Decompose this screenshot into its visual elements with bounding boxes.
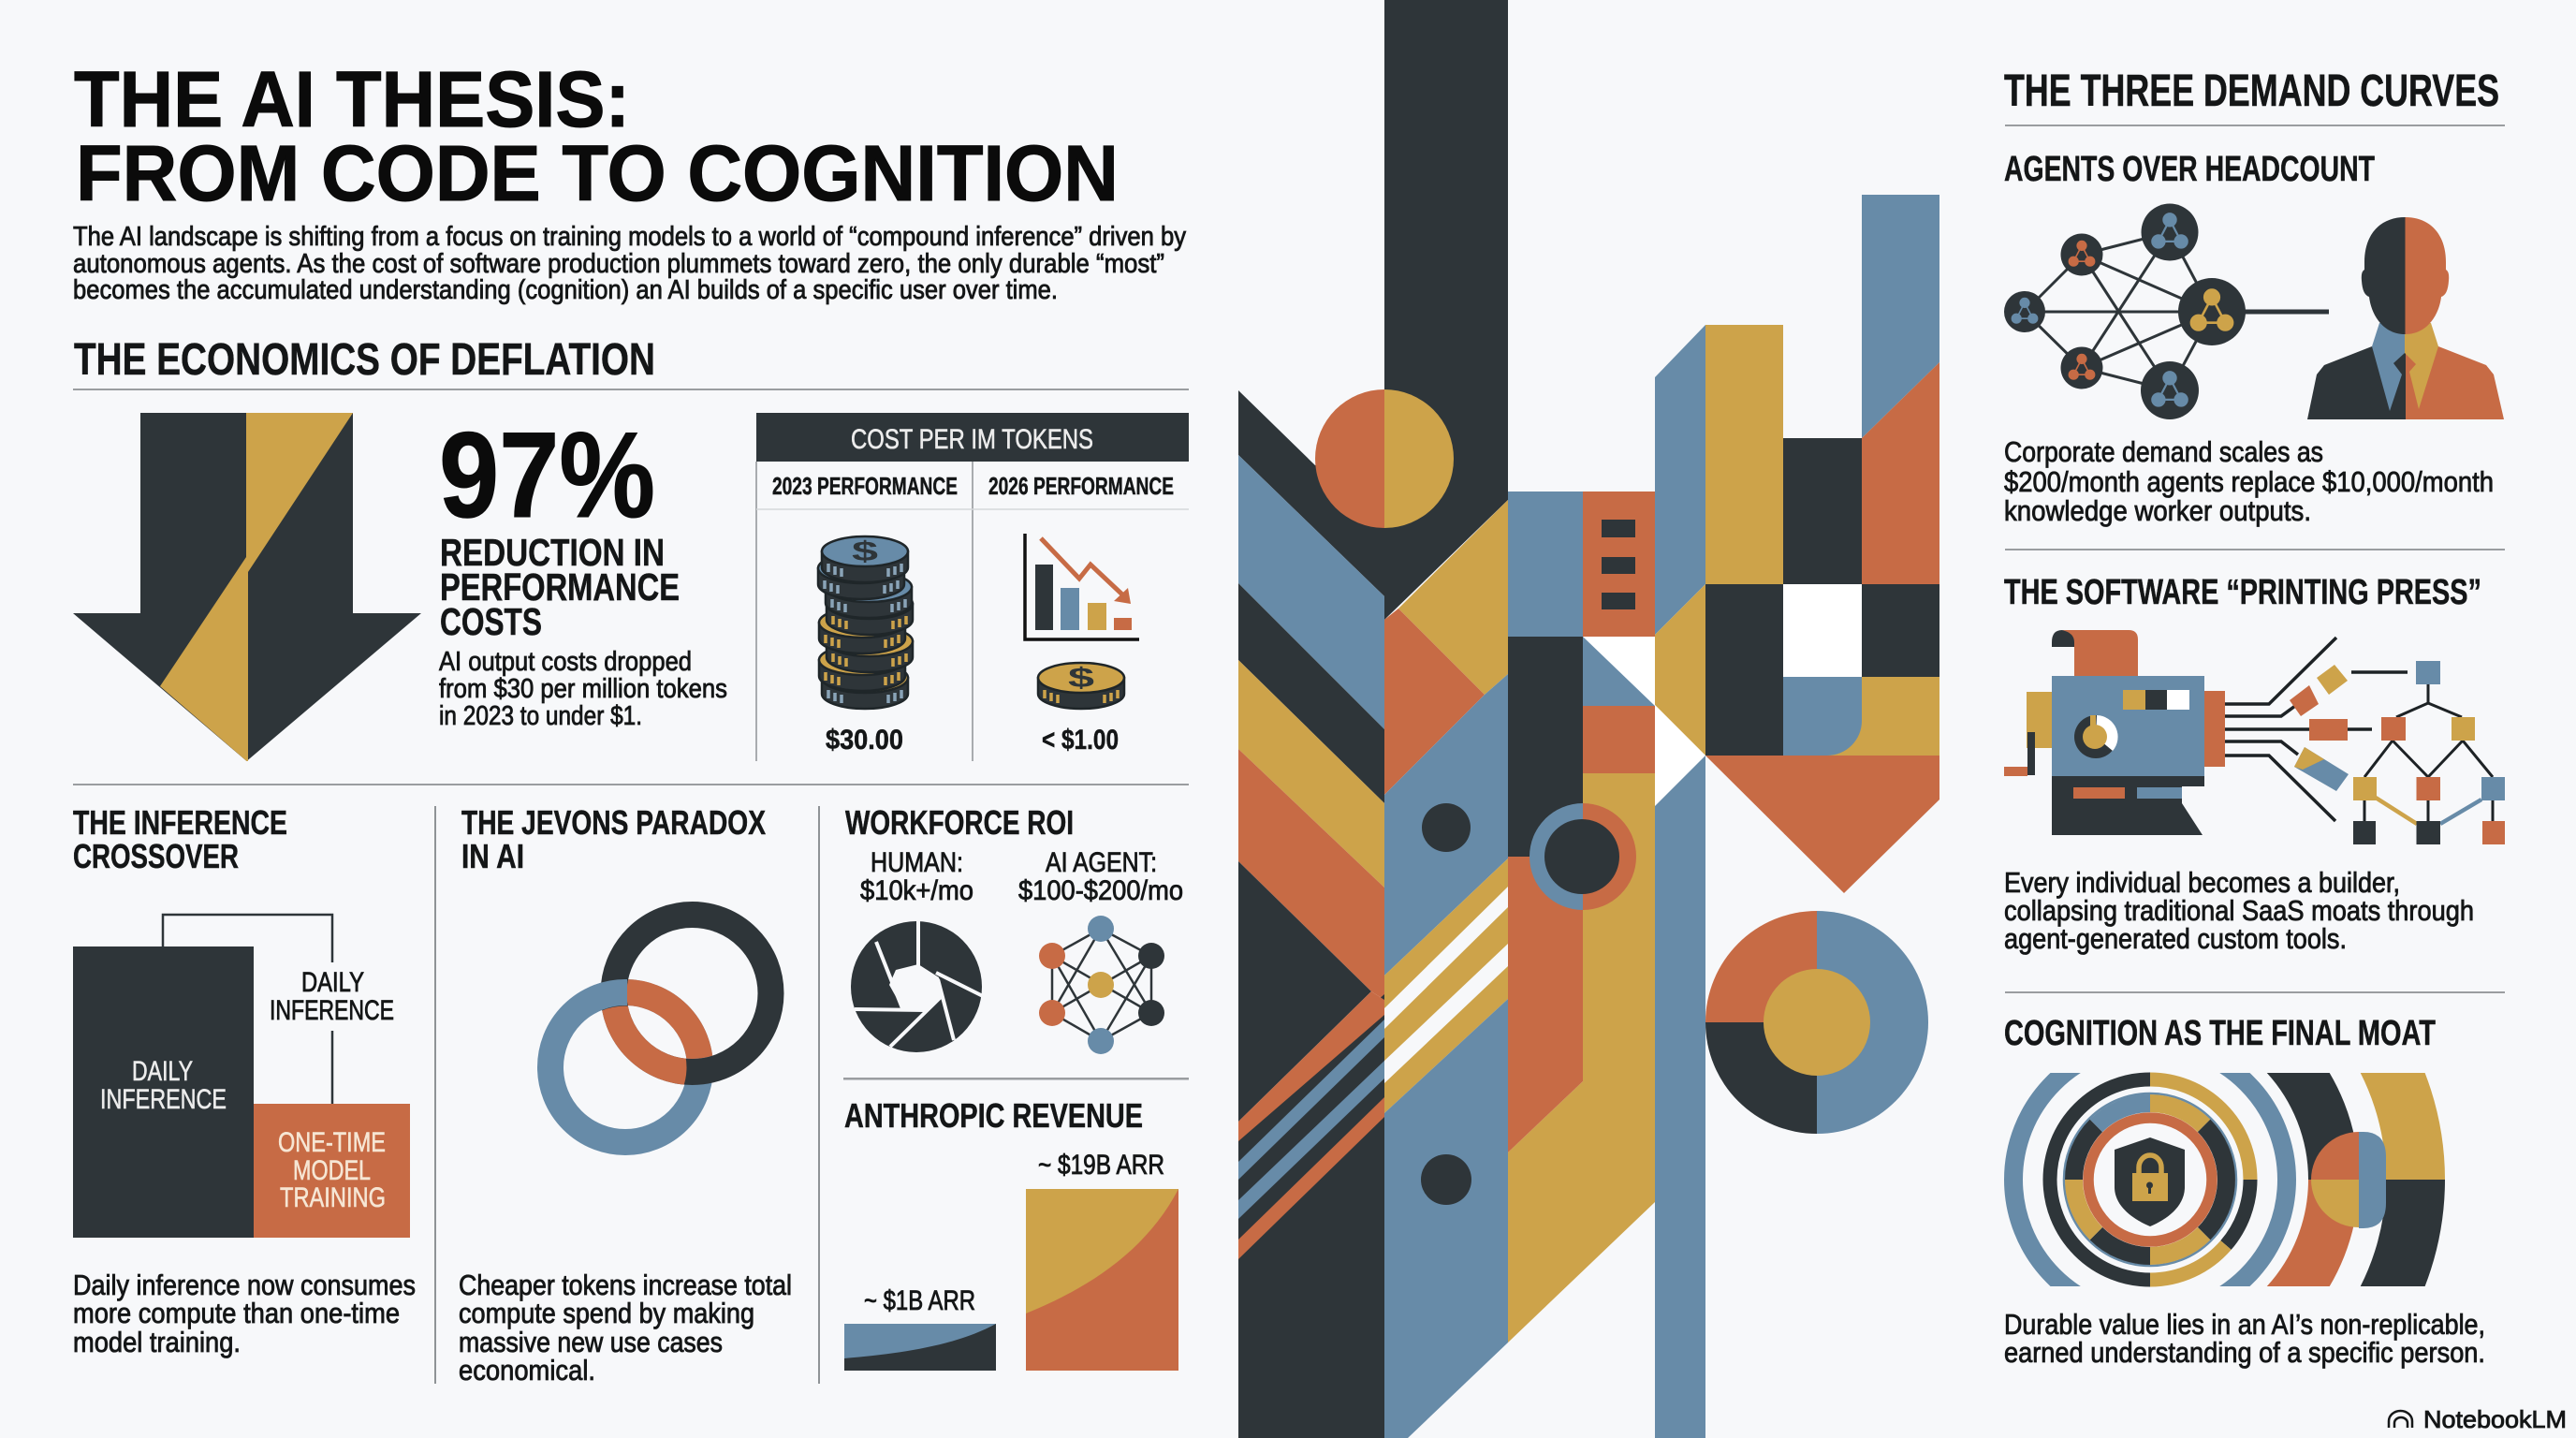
stat: 97 percent reduction: COSTS <box>440 600 542 643</box>
panel: cognition as the final moat <box>2004 1020 2483 1369</box>
stat: 97 percent reduction: AI output costs dropped <box>439 647 692 677</box>
panel: anthropic revenue: ANTHROPIC REVENUE <box>844 1096 1143 1135</box>
bar: daily inference <box>73 946 254 1238</box>
panel: the software printing press <box>2004 573 2505 955</box>
panel: cost per 1M tokens table: COST PER IM TOKENS <box>851 424 1093 455</box>
panel: cost per 1M tokens table <box>756 413 1189 761</box>
bar: daily inference: INFERENCE <box>100 1084 227 1115</box>
panel: the software printing press: agent-generated custom tools. <box>2004 922 2347 955</box>
icon: concentric moat with shield <box>2004 1073 2445 1286</box>
icon: split person silhouette <box>2307 217 2504 419</box>
panel: workforce ROI: $10k+/mo <box>860 875 973 906</box>
panel: the inference crossover: more compute than one-time <box>73 1297 400 1329</box>
icon: printing press machine <box>2004 630 2225 835</box>
icon: output lines and tiles <box>2225 638 2408 821</box>
bracket with daily inference label <box>163 915 394 1104</box>
panel: cost per 1M tokens table: $30.00 <box>826 725 903 756</box>
icon: coin stack <box>818 536 913 709</box>
panel: cognition as the final moat: earned understanding of a specific person. <box>2004 1336 2485 1369</box>
intro paragraph: autonomous agents. As the cost of software production plummets toward zero, the only durable “most” <box>73 249 1164 279</box>
central geometric artwork <box>1238 0 1939 1438</box>
panel: cost per 1M tokens table: 2026 PERFORMANCE <box>988 472 1174 500</box>
stat: 97 percent reduction: in 2023 to under $1. <box>439 701 642 731</box>
panel: anthropic revenue <box>844 1096 1178 1371</box>
panel: agents over headcount: $200/month agents replace $10,000/month <box>2004 465 2494 498</box>
logo: NotebookLM: NotebookLM <box>2423 1405 2567 1433</box>
intro paragraph: becomes the accumulated understanding (cognition) an AI builds of a specific user over time. <box>73 275 1058 305</box>
icon: single coin <box>1038 663 1124 709</box>
panel: the software printing press: collapsing traditional SaaS moats through <box>2004 894 2474 927</box>
icon: split circle <box>1315 389 1454 528</box>
title: FROM CODE TO COGNITION <box>76 129 1119 217</box>
panel: workforce ROI <box>845 803 1183 1054</box>
panel: the jevons paradox <box>459 803 792 1387</box>
icon: aperture <box>851 921 983 1052</box>
icon: quartered donut <box>1705 911 1928 1134</box>
stat: 97 percent reduction: from $30 per million tokens <box>439 674 727 704</box>
bar: one-time model training: MODEL <box>293 1155 371 1186</box>
icon: big down arrow <box>73 413 421 761</box>
panel: the jevons paradox: IN AI <box>461 837 524 875</box>
stat: 97 percent reduction <box>439 406 727 731</box>
icon: falling cost chart <box>1025 534 1139 639</box>
panel: the jevons paradox: Cheaper tokens increase total <box>459 1269 792 1301</box>
panel: the jevons paradox: economical. <box>459 1354 595 1387</box>
bar: one-time model training: ONE-TIME <box>278 1127 386 1158</box>
bar: 1B <box>844 1324 996 1371</box>
panel: agents over headcount <box>2004 150 2504 527</box>
bracket with daily inference label: INFERENCE <box>270 995 394 1026</box>
panel: agents over headcount: AGENTS OVER HEADCOUNT <box>2004 150 2375 189</box>
intro paragraph: The AI landscape is shifting from a focus on training models to a world of “compound inference” driven by <box>73 222 1186 252</box>
icon: agent mesh network <box>2004 204 2329 419</box>
panel: workforce ROI: AI AGENT: <box>1046 847 1157 878</box>
panel: the jevons paradox: compute spend by making <box>459 1297 754 1329</box>
panel: the jevons paradox: massive new use cases <box>459 1326 723 1358</box>
icon: interlocking rings <box>550 915 771 1142</box>
panel: workforce ROI: WORKFORCE ROI <box>845 803 1074 842</box>
panel: the inference crossover <box>73 803 416 1358</box>
panel: agents over headcount: Corporate demand scales as <box>2004 435 2323 468</box>
stat: 97 percent reduction: REDUCTION IN <box>440 531 665 574</box>
bracket with daily inference label: DAILY <box>301 967 364 998</box>
panel: cognition as the final moat: COGNITION AS THE FINAL MOAT <box>2004 1014 2436 1053</box>
title: THE AI THESIS: <box>74 55 630 143</box>
panel: the software printing press: Every individual becomes a builder, <box>2004 866 2400 899</box>
heading: the economics of deflation: THE ECONOMICS OF DEFLATION <box>74 335 655 385</box>
icon: agent network <box>1039 916 1164 1054</box>
icon: coin stack: $ <box>852 536 879 567</box>
stat: 97 percent reduction: PERFORMANCE <box>440 565 680 609</box>
panel: workforce ROI: HUMAN: <box>871 847 963 878</box>
bar: one-time model training: TRAINING <box>280 1182 386 1213</box>
panel: the inference crossover: CROSSOVER <box>73 837 239 875</box>
bar: one-time model training <box>254 1104 410 1238</box>
intro paragraph <box>73 222 1186 305</box>
panel: the inference crossover: Daily inference now consumes <box>73 1269 416 1301</box>
panel: the jevons paradox: THE JEVONS PARADOX <box>461 803 766 842</box>
panel: agents over headcount: knowledge worker outputs. <box>2004 494 2311 527</box>
panel: the inference crossover: THE INFERENCE <box>73 803 287 842</box>
panel: anthropic revenue: ~ $1B ARR <box>864 1285 975 1316</box>
panel: anthropic revenue: ~ $19B ARR <box>1038 1150 1164 1181</box>
panel: workforce ROI: $100-$200/mo <box>1018 875 1183 906</box>
bar: 19B <box>1026 1189 1178 1371</box>
title <box>74 55 1119 217</box>
icon: software tree diagram <box>2353 661 2505 844</box>
panel: cognition as the final moat: Durable value lies in an AI’s non-replicable, <box>2004 1308 2485 1341</box>
stat: 97 percent reduction: 97% <box>439 406 655 543</box>
panel: cost per 1M tokens table: 2023 PERFORMANCE <box>772 472 958 500</box>
panel: cost per 1M tokens table: < $1.00 <box>1042 725 1119 756</box>
bar: daily inference: DAILY <box>132 1056 193 1087</box>
icon: single coin: $ <box>1068 663 1095 694</box>
panel: the inference crossover: model training. <box>73 1326 241 1358</box>
